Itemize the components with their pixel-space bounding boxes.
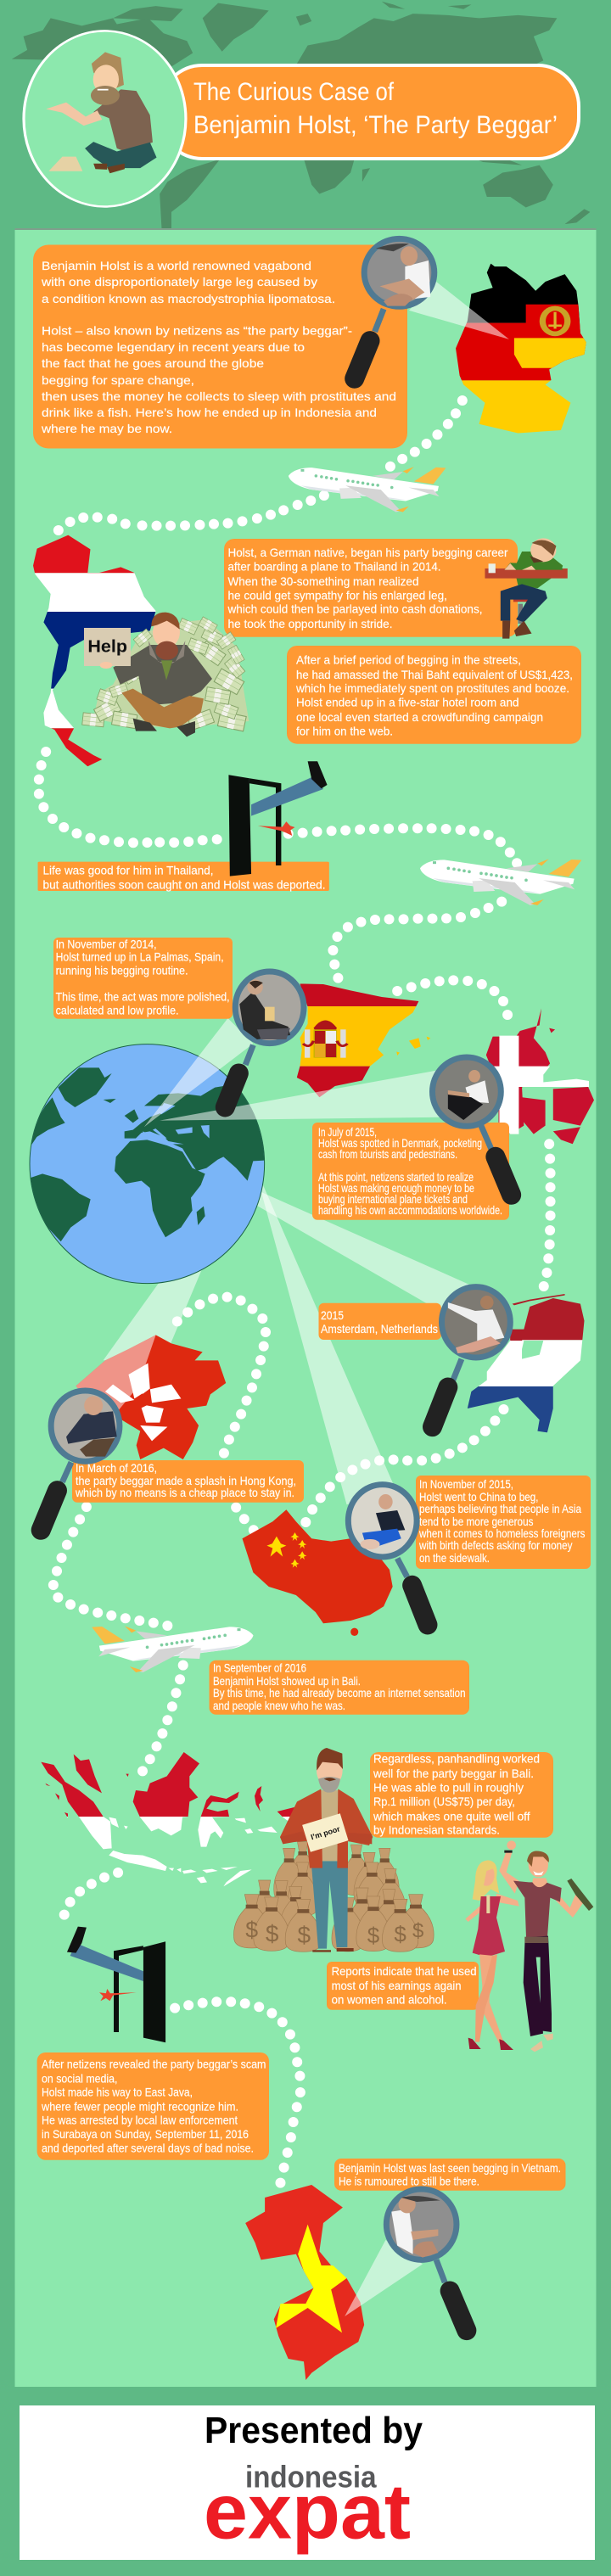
box: netizens [37, 2052, 269, 2160]
box: Bali arrival [209, 1660, 469, 1715]
box: netizens: in Surabaya on Sunday, September 11, 2016 [42, 2127, 249, 2141]
box: amassed money: for him on the web. [296, 725, 393, 738]
box: earnings spent: Reports indicate that he used [332, 1964, 477, 1978]
intro text box: with one disproportionately large leg caused by [41, 275, 317, 288]
box: amassed money: After a brief period of begging in the streets, [296, 653, 521, 667]
box: netizens: on social media, [42, 2071, 117, 2085]
box: Bali earnings [370, 1752, 553, 1838]
box: China: with birth defects asking for money [418, 1538, 572, 1552]
box: Bali earnings: by Indonesian standards. [373, 1823, 500, 1837]
box: Bali arrival: Benjamin Holst showed up in Bali. [213, 1674, 361, 1688]
intro text box: then uses the money he collects to sleep with prostitutes and [42, 389, 396, 403]
man with I'm poor sign and money bags [234, 1748, 434, 1952]
beggar with money pile [82, 613, 249, 736]
box: Bali arrival: By this time, he had already become an internet sensation [213, 1686, 465, 1700]
box: netizens: After netizens revealed the party beggar’s scam [42, 2058, 266, 2071]
box: Bali arrival: and people knew who he was. [213, 1699, 345, 1712]
I'm poor sign [302, 1813, 349, 1852]
magnifier: China [348, 1485, 428, 1625]
box: German native: he took the opportunity in stride. [227, 617, 392, 630]
deported text [42, 864, 326, 892]
box: China: In November of 2015, [419, 1477, 513, 1491]
route dots [39, 400, 551, 2183]
presented by heading: Presented by [205, 2410, 423, 2451]
box: netizens: and deported after several days of bad noise. [42, 2142, 254, 2155]
box: Netherlands: Amsterdam, Netherlands [321, 1322, 438, 1336]
box: German native: When the 30-something man realized [227, 574, 419, 588]
box: German native: after boarding a plane to Thailand in 2014. [227, 560, 441, 574]
door with kicking leg (Thailand) [38, 761, 329, 891]
intro text box [33, 244, 407, 448]
box: amassed money: he had amassed the Thai Baht equivalent of US$1,423, [296, 668, 573, 681]
intro text box: the fact that he goes around the globe [42, 356, 264, 370]
box: Hong Kong: In March of 2016, [76, 1461, 157, 1475]
party couple [465, 1840, 593, 2052]
box: earnings spent: on women and alcohol. [332, 1993, 447, 2007]
title line 1: The Curious Case of [193, 78, 395, 106]
drunk man at bar [485, 538, 568, 639]
box: China: Holst went to China to beg, [419, 1490, 538, 1504]
man with I'm poor sign and money bags: $ [412, 1919, 423, 1942]
map: Germany [451, 260, 592, 435]
magnifier: Vietnam [386, 2189, 467, 2331]
box: netizens: Holst made his way to East Java, [42, 2086, 193, 2099]
map: China [242, 1509, 393, 1636]
box: amassed money: which he immediately spent on prostitutes and booze. [295, 681, 569, 695]
logo: expat: expat [204, 2469, 411, 2556]
box: Spain [53, 938, 233, 1019]
box: Bali earnings: which makes one quite well off [373, 1810, 530, 1823]
box: Bali earnings: Rp.1 million (US$75) per day, [373, 1795, 515, 1808]
main panel [15, 228, 596, 2387]
magnifier: Hong Kong [41, 1391, 120, 1530]
box: German native: he could get sympathy for his enlarged leg, [227, 589, 447, 602]
box: earnings spent [327, 1962, 479, 2010]
magnifier: Netherlands [432, 1287, 510, 1427]
box: netizens: He was arrested by local law enforcement [42, 2113, 238, 2126]
box: netizens: where fewer people might recognize him. [41, 2099, 238, 2113]
map: Denmark [486, 1008, 594, 1144]
world map backdrop [12, 2, 590, 229]
title pill [161, 65, 579, 159]
box: China: on the sidewalk. [419, 1551, 490, 1565]
intro text box: a condition known as macrodystrophia lipomatosa. [42, 292, 335, 305]
box: Spain: In November of 2014, [56, 938, 157, 951]
map: Hong Kong [76, 1335, 226, 1459]
man with I'm poor sign and money bags: $ [367, 1923, 380, 1948]
man with I'm poor sign and money bags: $ [266, 1920, 279, 1946]
intro text box: Benjamin Holst is a world renowned vagabond [42, 259, 311, 272]
box: Denmark [312, 1123, 509, 1220]
box: Spain: calculated and low profile. [56, 1004, 179, 1017]
intro text box: drink like a fish. Here’s how he ended up in Indonesia and [42, 406, 377, 419]
title line 2: Benjamin Holst, ‘The Party Beggar’ [193, 111, 558, 139]
map: Vietnam [245, 2185, 423, 2380]
box: Bali earnings: well for the party beggar in Bali. [373, 1767, 534, 1780]
box: China [416, 1476, 591, 1569]
deported text: Life was good for him in Thailand, [42, 864, 214, 877]
intro text box: where he may be now. [41, 422, 172, 435]
box: Bali earnings: Regardless, panhandling worked [373, 1752, 540, 1766]
box: Hong Kong [72, 1460, 304, 1503]
box: Denmark: Holst was spotted in Denmark, pocketing [318, 1136, 482, 1150]
box: Denmark: buying international plane tickets and [318, 1192, 468, 1206]
box: Netherlands [319, 1303, 441, 1340]
box: Denmark: handling his own accommodations worldwide. [318, 1203, 502, 1217]
airplane 1 [289, 467, 446, 512]
box: German native [224, 539, 518, 637]
man with I'm poor sign and money bags: $ [298, 1922, 311, 1948]
intro text box: begging for spare change, [42, 373, 194, 387]
Help sign [84, 628, 131, 666]
box: Bali arrival: In September of 2016 [213, 1661, 306, 1675]
box: deported [38, 862, 329, 891]
box: Denmark: Holst was making enough money to be [318, 1181, 474, 1195]
box: China: perhaps believing that people in Asia [419, 1502, 581, 1515]
magnifier: Denmark [432, 1057, 512, 1195]
box: amassed money [287, 646, 581, 744]
Help sign: Help [87, 637, 127, 656]
box: Spain: This time, the act was more polished, [56, 990, 230, 1004]
box: Bali earnings: He was able to pull in roughly [373, 1781, 524, 1795]
man with I'm poor sign and money bags: $ [245, 1917, 258, 1942]
box: Denmark: cash from tourists and pedestrians. [318, 1147, 457, 1161]
globe [25, 1044, 280, 1284]
box: Hong Kong: the party beggar made a splash in Hong Kong, [76, 1474, 296, 1487]
box: Vietnam: He is rumoured to still be there. [339, 2175, 479, 2188]
map: Indonesia [41, 1752, 294, 1887]
logo: indonesia: indonesia [245, 2460, 377, 2495]
footer panel [20, 2405, 595, 2560]
airplane 2 [420, 859, 581, 905]
box: amassed money: one local even started a crowdfunding campaign [296, 710, 543, 724]
deported text: but authorities soon caught on and Holst was deported. [42, 878, 326, 892]
intro text box: has become legendary in recent years due to [42, 340, 305, 354]
box: China: tend to be more generous [419, 1515, 533, 1528]
light beams over globe [144, 1018, 444, 1127]
box: Denmark: In July of 2015, [318, 1125, 377, 1139]
box: amassed money: Holst ended up in a five-star hotel room and [296, 696, 519, 709]
magnifier: Germany [355, 238, 509, 378]
map: Spain [292, 982, 430, 1100]
box: Hong Kong: which by no means is a cheap place to stay in. [75, 1486, 294, 1499]
map: Netherlands [463, 1294, 588, 1435]
box: earnings spent: most of his earnings again [332, 1979, 462, 1992]
man with I'm poor sign and money bags: $ [394, 1921, 406, 1946]
coat of arms [303, 1020, 347, 1058]
GDR emblem [540, 306, 570, 336]
box: Vietnam: Benjamin Holst was last seen begging in Vietnam. [339, 2161, 561, 2175]
box: Vietnam [334, 2159, 565, 2191]
door with kicking leg (Java) [67, 1927, 165, 2042]
magnifier: Spain [225, 972, 304, 1107]
box: Netherlands: 2015 [321, 1308, 344, 1322]
box: Spain: Holst turned up in La Palmas, Spain, [56, 950, 224, 964]
airplane 3 [92, 1626, 254, 1672]
box: Denmark: At this point, netizens started to realize [318, 1170, 474, 1184]
box: German native: Holst, a German native, began his party begging career [227, 546, 508, 559]
I'm poor sign: I’m poor [310, 1824, 341, 1841]
box: Spain: running his begging routine. [56, 964, 188, 977]
portrait circle with beggar [24, 31, 186, 206]
map: Thailand [27, 532, 160, 768]
box: German native: which could then be parlayed into cash donations, [227, 602, 482, 616]
light beams from globe to magnifiers [104, 1139, 471, 1504]
intro text box: Holst – also known by netizens as “the party beggar”- [42, 324, 352, 338]
